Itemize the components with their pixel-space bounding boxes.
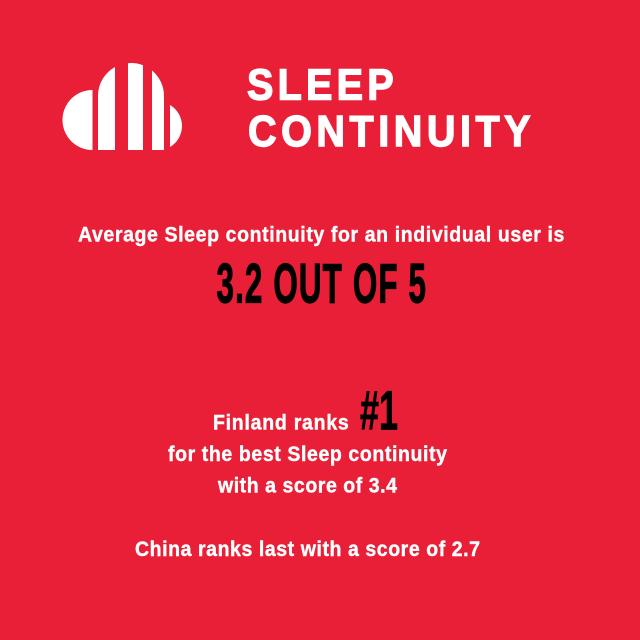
text: average intro: Average Sleep continuity for an individual user is	[78, 224, 564, 247]
text: China ranks last: China ranks last with a score of 2.7	[135, 538, 480, 561]
title: CONTINUITY	[248, 106, 531, 155]
text: Finland score: with a score of 3.4	[217, 475, 398, 498]
headline: average score: 3.2 OUT OF 5	[216, 252, 426, 315]
title: SLEEP	[247, 60, 394, 109]
title	[247, 60, 531, 155]
text: best continuity: for the best Sleep continuity	[168, 443, 448, 466]
rank number: #1: #1	[360, 378, 398, 442]
text: Finland ranks: Finland ranks	[213, 412, 349, 435]
icon: striped cloud logo	[63, 63, 182, 150]
